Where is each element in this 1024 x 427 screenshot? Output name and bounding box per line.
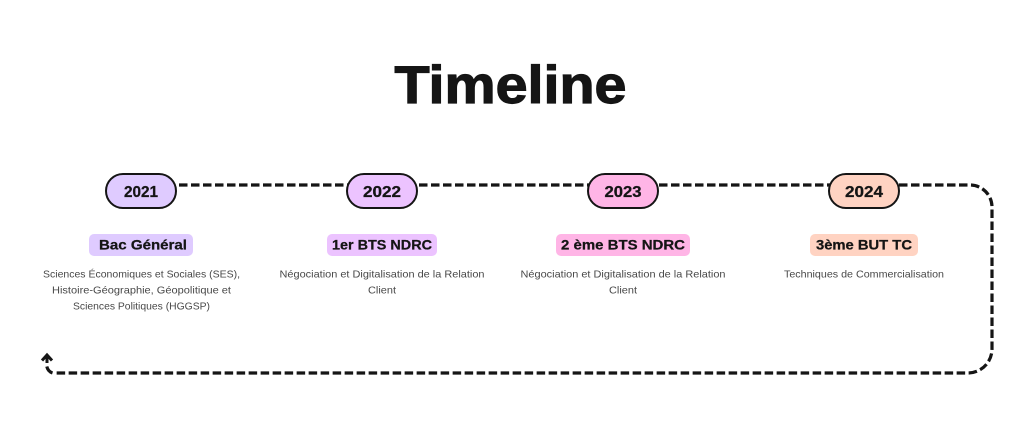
year pill 2021: 2021: [124, 184, 158, 201]
year pill 2022: 2022: [363, 184, 401, 201]
heading tag: 1er BTS NDRC: 1er BTS NDRC: [332, 238, 432, 252]
description 2023: Négociation et Digitalisation de la Relation: [520, 268, 726, 280]
description 2023: Client: [609, 284, 637, 296]
heading tag: 3ème BUT TC: [810, 234, 918, 256]
heading tag: 3ème BUT TC: 3ème BUT TC: [816, 238, 912, 252]
panel: 2023: [520, 174, 726, 296]
heading tag: 2 ème BTS NDRC: 2 ème BTS NDRC: [561, 238, 685, 252]
description 2021: Sciences Économiques et Sociales (SES),: [43, 268, 240, 280]
heading tag: Bac Général: Bac Général: [99, 238, 187, 252]
description 2021: [43, 268, 240, 312]
panel: 2021: [43, 174, 240, 312]
description 2021: Histoire-Géographie, Géopolitique et: [52, 284, 231, 296]
heading tag: 1er BTS NDRC: [327, 234, 437, 256]
year pill 2021: [106, 174, 176, 208]
year pill 2024: 2024: [845, 184, 883, 201]
title: Timeline: [394, 56, 626, 115]
description 2024: Techniques de Commercialisation: [784, 268, 944, 280]
panel: 2022: [280, 174, 485, 296]
year pill 2023: 2023: [604, 184, 642, 201]
description 2021: Sciences Politiques (HGGSP): [73, 300, 210, 312]
year pill 2024: [829, 174, 899, 208]
description 2022: [280, 268, 485, 296]
description 2022: Négociation et Digitalisation de la Relation: [280, 268, 485, 280]
year pill 2023: [588, 174, 658, 208]
panel: 2024: [784, 174, 944, 280]
description 2023: [520, 268, 726, 296]
heading tag: Bac Général: [89, 234, 193, 256]
heading tag: 2 ème BTS NDRC: [556, 234, 690, 256]
dashed timeline arrow path: [42, 185, 992, 373]
year pill 2022: [347, 174, 417, 208]
description 2022: Client: [368, 284, 396, 296]
